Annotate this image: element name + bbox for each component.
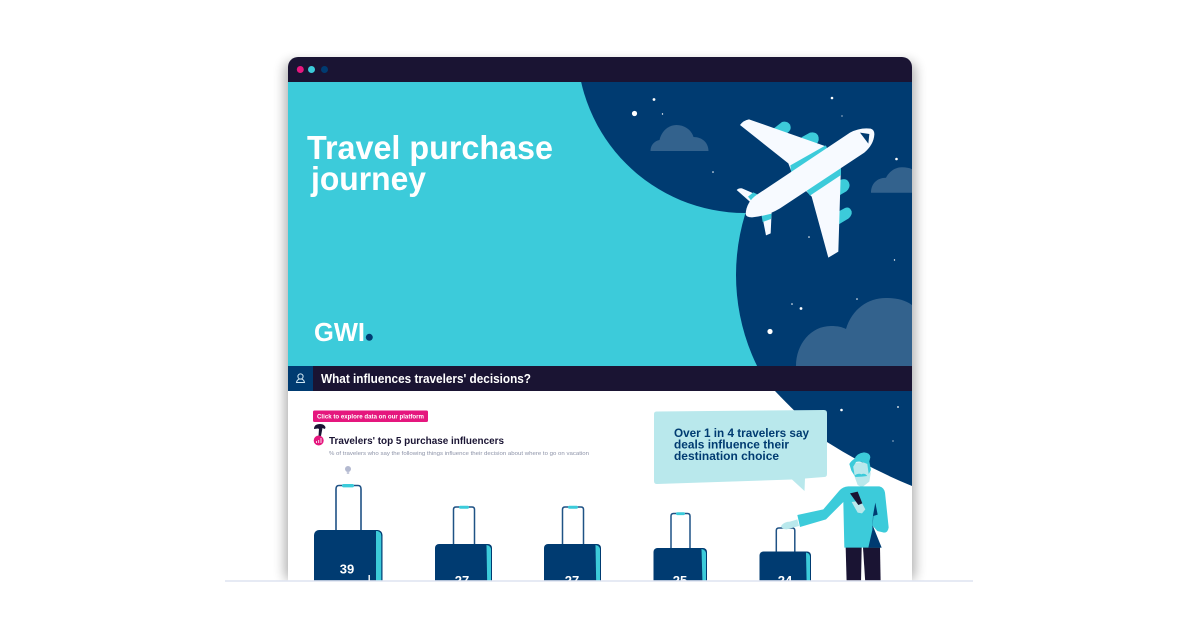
title: journey: [310, 160, 427, 197]
section header bar: [288, 366, 912, 391]
button: Click to explore data on our platform: [317, 414, 424, 420]
callout: [654, 410, 827, 491]
title: [307, 129, 553, 197]
icon: person: [296, 374, 304, 382]
hair: [849, 452, 871, 476]
icon: pin: [345, 466, 351, 474]
person with phone: [781, 452, 889, 583]
infographic: [225, 54, 973, 582]
suitcase bar: 25: [654, 512, 707, 580]
cloud: upper left: [650, 125, 708, 151]
button: [313, 410, 428, 422]
suitcase bar: 25: 25: [673, 573, 687, 588]
title: Travel purchase: [307, 129, 553, 166]
neck and face: [853, 462, 871, 487]
browser window: [288, 57, 912, 580]
suitcase bar: 39: 39: [340, 562, 354, 576]
suitcase bar: 27: [544, 506, 601, 580]
logo: GWI: GWI: [314, 317, 365, 347]
cloud: large: [796, 298, 912, 366]
suitcase bar: 39: [314, 484, 382, 580]
suitcase bar: 27: [435, 506, 492, 580]
section header bar: What influences travelers' decisions?: [321, 372, 531, 386]
cloud: right: [871, 167, 912, 193]
floor line: [225, 580, 973, 582]
chart heading: Travelers' top 5 purchase influencers: [329, 436, 504, 447]
suitcase bar: 27: 27: [565, 573, 579, 588]
moustache: [855, 474, 867, 477]
cursor mark: [314, 424, 326, 436]
suitcase bar: 27: 27: [455, 573, 469, 588]
window shadow: [285, 62, 915, 581]
callout: deals influence their: [674, 440, 790, 452]
hand and phone: [852, 501, 865, 513]
logo: GWI: [315, 322, 373, 342]
legs: [846, 547, 862, 583]
night sky corner: [775, 391, 912, 486]
chart subheading: % of travelers who say the following things influence their decision about where to go on vacation: [329, 451, 589, 457]
title bar: [288, 57, 912, 82]
suitcase bar: 24: 24: [778, 573, 793, 588]
lower panel: [313, 391, 912, 580]
torso and arm: [797, 486, 889, 548]
hand on suitcase: [781, 519, 799, 529]
stars: [632, 97, 898, 334]
icon: airplane: [737, 119, 874, 258]
callout: destination choice: [674, 451, 779, 463]
callout: Over 1 in 4 travelers say: [674, 428, 810, 440]
hero panel: [288, 82, 912, 366]
icon: chart badge: [314, 436, 324, 446]
night sky shapes: [581, 82, 912, 366]
suitcase bar: 24: [760, 527, 811, 580]
